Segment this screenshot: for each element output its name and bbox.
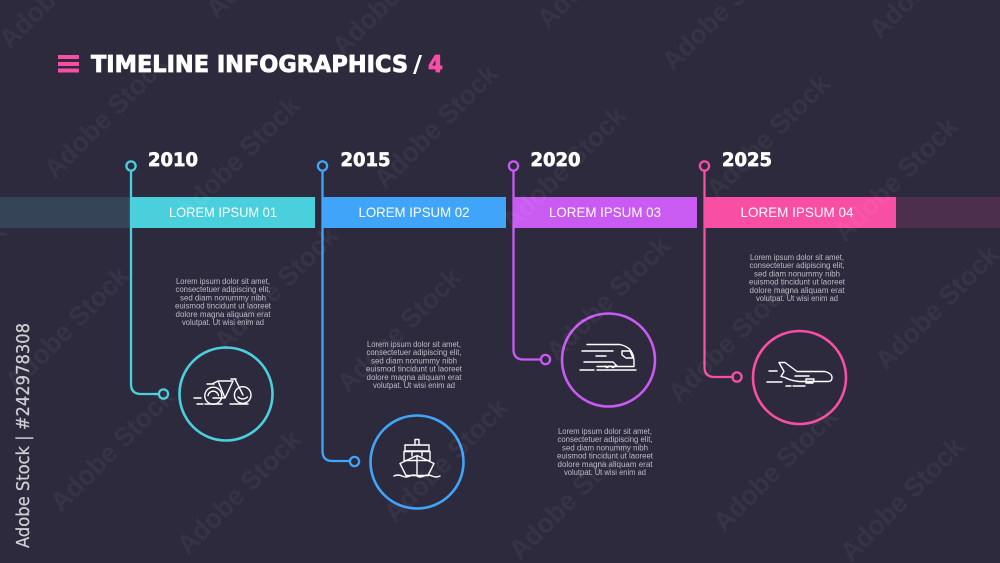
bar [513,197,697,228]
year: 2020 [530,149,580,171]
text block: sed diam nonummy nibh [562,443,648,452]
panel: 2020 [509,149,697,477]
icon circle [370,416,464,508]
watermark pattern: Adobe Stock [208,220,344,356]
watermark pattern: Adobe Stock [496,100,632,236]
heading: TIMELINE INFOGRAPHICS [91,52,408,78]
bar [704,197,896,228]
heading slash: / [413,52,423,78]
watermark pattern: Adobe Stock [828,111,964,247]
text block [749,253,846,303]
text block: sed diam nonummy nibh [371,356,457,365]
text block: dolore magna aliquam erat [366,373,462,382]
text block: volutpat. Ut wisi enim ad [182,318,264,327]
watermark pattern: Adobe Stock [503,429,639,563]
connector [318,161,359,466]
faded bar left [0,197,130,228]
text block: consectetuer adipiscing elit, [558,435,652,444]
heading number: 4 [428,52,443,78]
watermark pattern: Adobe Stock [368,58,504,194]
text block: Lorem ipsum dolor sit amet, [176,277,270,286]
text block: euismod tincidunt ut laoreet [557,452,654,461]
icon circle [562,314,655,406]
text block: volutpat. Ut wisi enim ad [756,294,838,303]
year: 2025 [722,149,772,171]
bar label: LOREM IPSUM 03 [549,204,661,220]
year: 2015 [340,149,390,171]
connector [509,161,550,364]
icon circle [180,348,272,440]
text block: Lorem ipsum dolor sit amet, [750,253,844,262]
watermark pattern: Adobe Stock [378,392,514,528]
watermark pattern: Adobe Stock [540,230,676,366]
watermark pattern: Adobe Stock [331,262,467,398]
panel: 2015 [318,149,506,508]
icon: ship [394,440,440,477]
bar label: LOREM IPSUM 02 [358,204,470,220]
text block: dolore magna aliquam erat [558,460,653,469]
text block: consectetuer adipiscing elit, [366,348,462,357]
watermark pattern: Adobe Stock [662,272,798,408]
text block: Lorem ipsum dolor sit amet, [558,427,652,436]
text block: sed diam nonummy nibh [180,293,266,302]
text block: sed diam nonummy nibh [754,269,840,278]
text block: Lorem ipsum dolor sit amet, [367,340,461,349]
text block [366,340,463,390]
watermark pattern: Adobe Stock [44,381,180,517]
watermark pattern: Adobe Stock [0,260,135,396]
watermark pattern: Adobe Stock [171,424,307,560]
text block: volutpat. Ut wisi enim ad [373,381,455,390]
year: 2010 [148,149,198,171]
bar [130,197,315,228]
icon: menu [58,55,79,72]
text block: euismod tincidunt ut laoreet [175,302,272,311]
text block: consectetuer adipiscing elit, [750,261,844,270]
watermark pattern: Adobe Stock [700,68,836,204]
icon: bicycle [194,379,251,404]
bar [322,197,506,228]
text block: euismod tincidunt ut laoreet [366,365,463,374]
watermark pattern: Adobe Stock [170,90,306,226]
title [58,52,443,78]
text block: dolore magna aliquam erat [176,310,271,319]
connector [126,161,168,399]
faded bar right [896,197,1000,228]
text block [175,277,272,327]
text block: euismod tincidunt ut laoreet [749,278,846,287]
connector [700,161,742,382]
text block: volutpat. Ut wisi enim ad [564,468,646,477]
panel: 2025 [700,149,896,424]
text block: consectetuer adipiscing elit, [176,285,270,294]
icon circle [753,331,846,424]
text block [557,427,654,477]
watermark pattern: Adobe Stock [38,48,174,184]
bar label: LOREM IPSUM 01 [169,204,277,220]
icon: airplane [767,362,832,386]
panel: 2010 [126,149,315,440]
text block: dolore magna aliquam erat [750,286,845,295]
bar label: LOREM IPSUM 04 [740,204,854,220]
icon: train [580,344,636,370]
stock id side text: Adobe Stock | #242978308 [14,323,34,548]
watermark pattern: Adobe Stock [707,401,843,537]
